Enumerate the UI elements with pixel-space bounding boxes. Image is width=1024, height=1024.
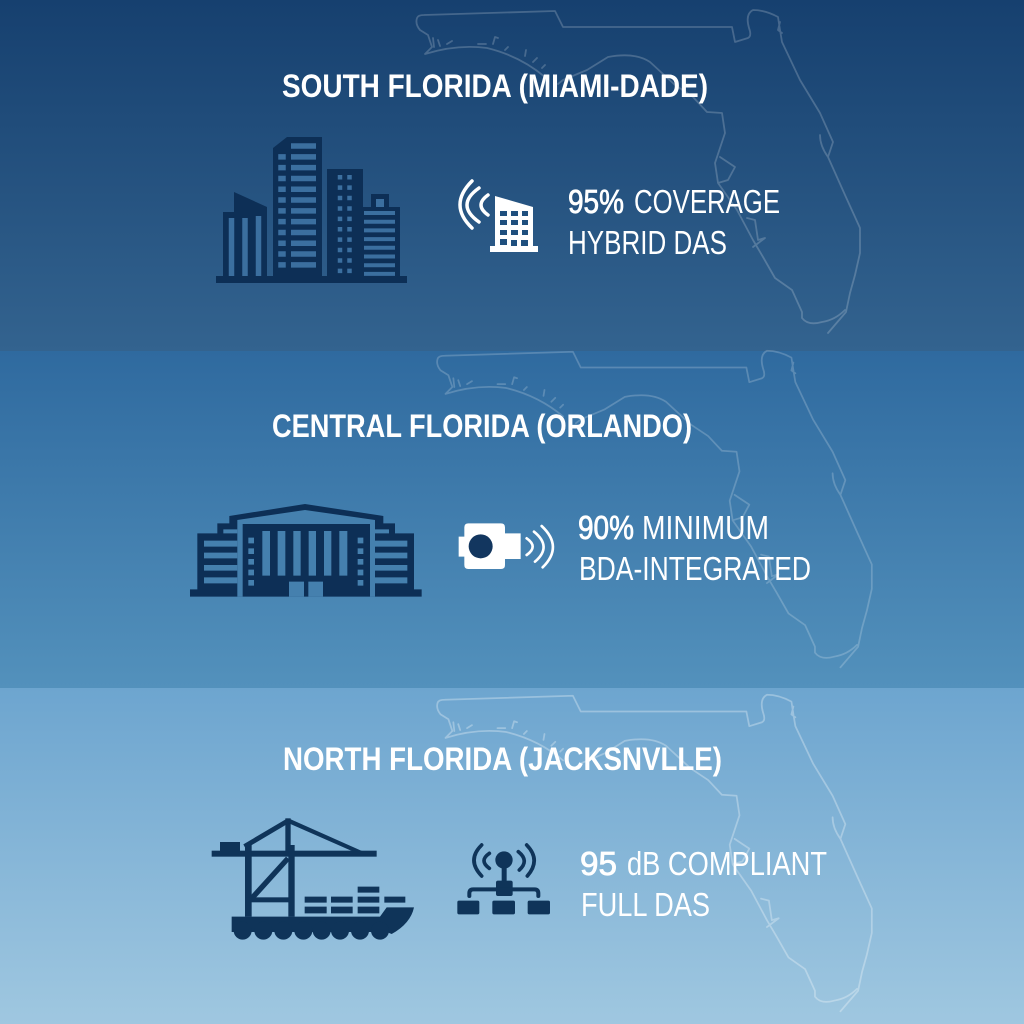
icon: port crane and container ship bbox=[212, 818, 414, 940]
stat text: North Florida: FULL DAS bbox=[581, 886, 710, 923]
map outline: North Florida panel bbox=[437, 695, 872, 1011]
stat text: North Florida: 95 bbox=[580, 845, 617, 882]
stat text: Central Florida: 90% bbox=[578, 509, 634, 546]
stat text: South Florida: HYBRID DAS bbox=[568, 224, 727, 261]
panel: North Florida bbox=[0, 688, 1024, 1024]
panel: Central Florida bbox=[0, 351, 1024, 688]
icon: BDA signal booster bbox=[459, 523, 553, 569]
stat text: Central Florida: BDA-INTEGRATED bbox=[579, 550, 811, 587]
stat text: South Florida: COVERAGE bbox=[634, 183, 780, 220]
icon: DAS antenna network bbox=[457, 845, 550, 914]
heading: Central Florida: CENTRAL FLORIDA (ORLANDO) bbox=[272, 408, 692, 444]
stat text: Central Florida bbox=[578, 509, 811, 587]
stat text: North Florida bbox=[580, 845, 827, 923]
icon: city skyline bbox=[216, 137, 407, 283]
map outline: Central Florida panel bbox=[437, 351, 872, 667]
map outline: South Florida panel bbox=[416, 10, 860, 333]
icon: building with signal bbox=[460, 181, 538, 252]
stat text: South Florida bbox=[568, 183, 780, 261]
heading: North Florida: NORTH FLORIDA (JACKSNVLLE) bbox=[283, 741, 722, 777]
heading: South Florida: SOUTH FLORIDA (MIAMI-DADE) bbox=[282, 68, 708, 104]
stat text: North Florida: dB COMPLIANT bbox=[627, 845, 827, 882]
icon: convention center bbox=[190, 504, 422, 597]
panel: South Florida bbox=[0, 0, 1024, 351]
stat text: Central Florida: MINIMUM bbox=[642, 509, 769, 546]
stat text: South Florida: 95% bbox=[568, 183, 624, 220]
